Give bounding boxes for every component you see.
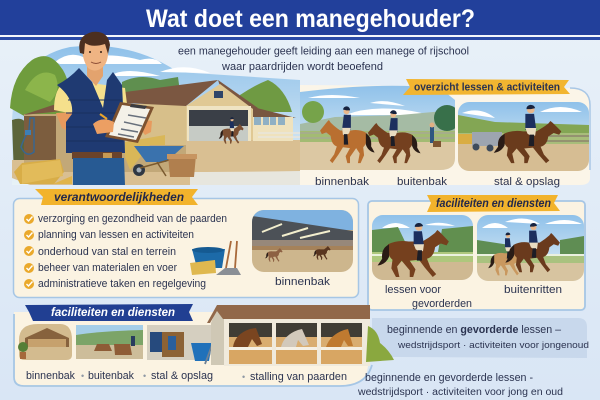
captions: • [242,372,245,382]
bush [366,326,394,362]
scene: two riders [300,85,460,170]
captions: stal & opslag [151,370,213,382]
captions: • [81,371,84,381]
trees [10,56,70,125]
callout: lessons strip: wedstrijdsport · activiteiten voor jongenoud [397,340,589,351]
callout: lessons strip: beginnende en gevorderde lessen – [387,324,562,336]
horse and rider: advanced lessons [378,223,449,277]
barn [24,114,186,172]
banner: overzicht lessen & activiteiten [403,79,570,95]
captions: gevorderden [412,298,472,310]
neck [87,66,103,86]
checklist: verzorging en gezondheid van de paarden [38,213,227,225]
captions [385,284,562,310]
arm [56,112,116,134]
banner: overzicht lessen & activiteiten: overzicht lessen & activiteiten [414,82,560,94]
photo: outdoor rides [477,215,584,281]
caption: binnenbak: binnenbak [275,276,331,288]
captions: lessen voor [385,284,441,296]
captions: buitenritten [504,284,562,296]
bucket, hay and rake [190,241,241,275]
callout: lessons strip [366,318,589,362]
captions: buitenbak [88,370,134,382]
closing text: beginnende en gevorderde lessen - [365,372,533,384]
photo: advanced lessons [372,215,473,280]
photo: tack storage [147,325,218,364]
checklist: beheer van materialen en voer [38,262,177,274]
stable with three horses [207,305,370,366]
clipboard [105,102,154,143]
hand with pen [93,119,114,134]
sky [12,46,300,185]
horse and rider 3 [494,105,561,163]
intro text: een manegehouder geeft leiding aan een manege of rijschool [178,46,469,58]
photo: arena building [18,324,72,360]
banner: faciliteiten en diensten [51,305,175,319]
panel: faciliteiten en diensten, bottom [14,304,372,387]
horse and rider: outdoor rides [505,223,560,272]
checklist: administratieve taken en regelgeving [38,278,206,290]
yellow sleeves and shirt [54,80,127,114]
stable side, hose and equipment [24,116,56,160]
panel: lesson overview [300,85,590,188]
distant horse and rider [219,117,244,144]
title band [0,0,600,40]
title: Wat doet een manegehouder? [146,5,475,33]
barn opening [187,106,251,141]
ground [12,140,300,185]
horse and rider 1 [320,106,375,163]
panel: faciliteiten en diensten, right [368,195,585,310]
wheelbarrow [134,146,184,162]
indoor arena photo [252,210,353,272]
checklist: onderhoud van stal en terrein [38,246,176,258]
scene captions: stal & opslag [494,176,560,188]
man with clipboard [54,32,154,185]
checklist [24,213,227,290]
face [82,39,108,71]
checklist: planning van lessen en activiteiten [38,229,194,241]
horse and rider 2 [368,110,421,163]
scene captions [315,176,560,188]
hay bales [14,159,64,184]
closing text [357,372,563,398]
scene captions: binnenbak [315,176,370,188]
banner [25,304,193,321]
hero scene: riding school [10,46,300,185]
belt [72,152,122,159]
banner: faciliteiten en diensten [436,196,551,210]
jeans [73,158,125,185]
photo: outdoor arena [76,325,143,359]
smile [91,62,101,64]
intro text: waar paardrijden wordt beoefend [221,61,383,73]
intro text [178,46,469,73]
captions: binnenbak [26,370,75,382]
scene: stable and storage [458,102,589,171]
closing text: wedstrijdsport · activiteiten voor jong en oud [357,387,563,398]
wooden crate [168,155,196,177]
captions: • [143,371,146,381]
captions: stalling van paarden [250,371,347,383]
captions [26,370,347,383]
panel: verantwoordelijkheden [14,189,358,298]
hair [79,32,110,54]
padded vest [57,68,125,153]
panel background [300,85,590,185]
scene captions: buitenbak [397,176,448,188]
banner: verantwoordelijkheden [54,190,184,204]
